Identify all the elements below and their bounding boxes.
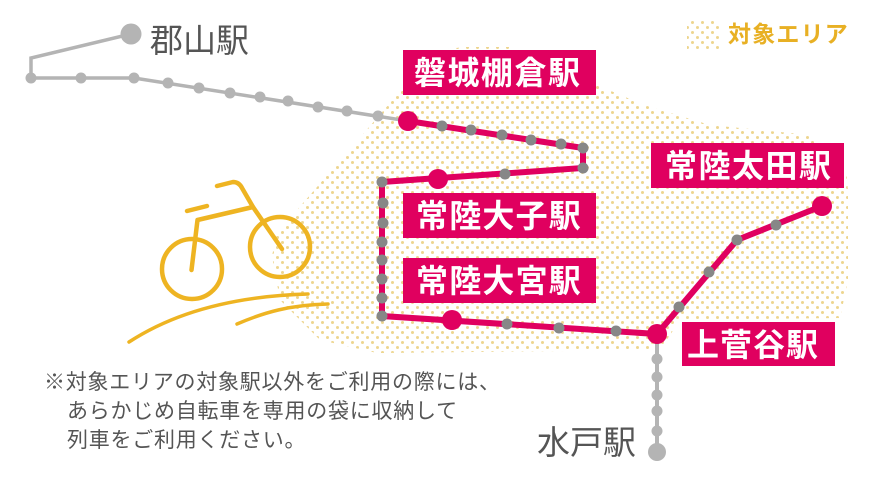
note text: ※対象エリアの対象駅以外をご利用の際には、 [44, 371, 501, 394]
legend: target area: 対象エリア [728, 21, 849, 47]
pink line: Iwaki-Tanagura to Kami-Sugaya [376, 111, 832, 344]
gray line to Mito [648, 334, 666, 461]
target area dotted region [272, 47, 848, 353]
label: Koriyama station: 郡山駅 [150, 22, 249, 59]
small station dots [376, 120, 782, 336]
note text: あらかじめ自転車を専用の袋に収納して [67, 400, 458, 423]
label: Hitachi-Daigo station [403, 193, 596, 238]
label: Hitachi-Omiya station: 常陸大宮駅 [416, 263, 582, 299]
bicycle illustration [129, 182, 328, 342]
label: Hitachi-Ota station [651, 143, 844, 188]
legend: target area [687, 19, 849, 49]
label: Hitachi-Daigo station: 常陸大子駅 [416, 198, 582, 234]
main station dots [398, 111, 832, 344]
label: Hitachi-Ota station: 常陸太田駅 [665, 148, 833, 184]
label: Kami-Sugaya station: 上菅谷駅 [687, 327, 819, 363]
label: Iwaki-Tanagura station: 磐城棚倉駅 [414, 55, 582, 91]
gray line from Koriyama [26, 24, 408, 122]
label: Mito station: 水戸駅 [537, 424, 636, 461]
label: Hitachi-Omiya station [403, 258, 596, 303]
label: Iwaki-Tanagura station [403, 50, 596, 95]
note text: 列車をご利用ください。 [67, 429, 306, 452]
note text [44, 371, 501, 452]
